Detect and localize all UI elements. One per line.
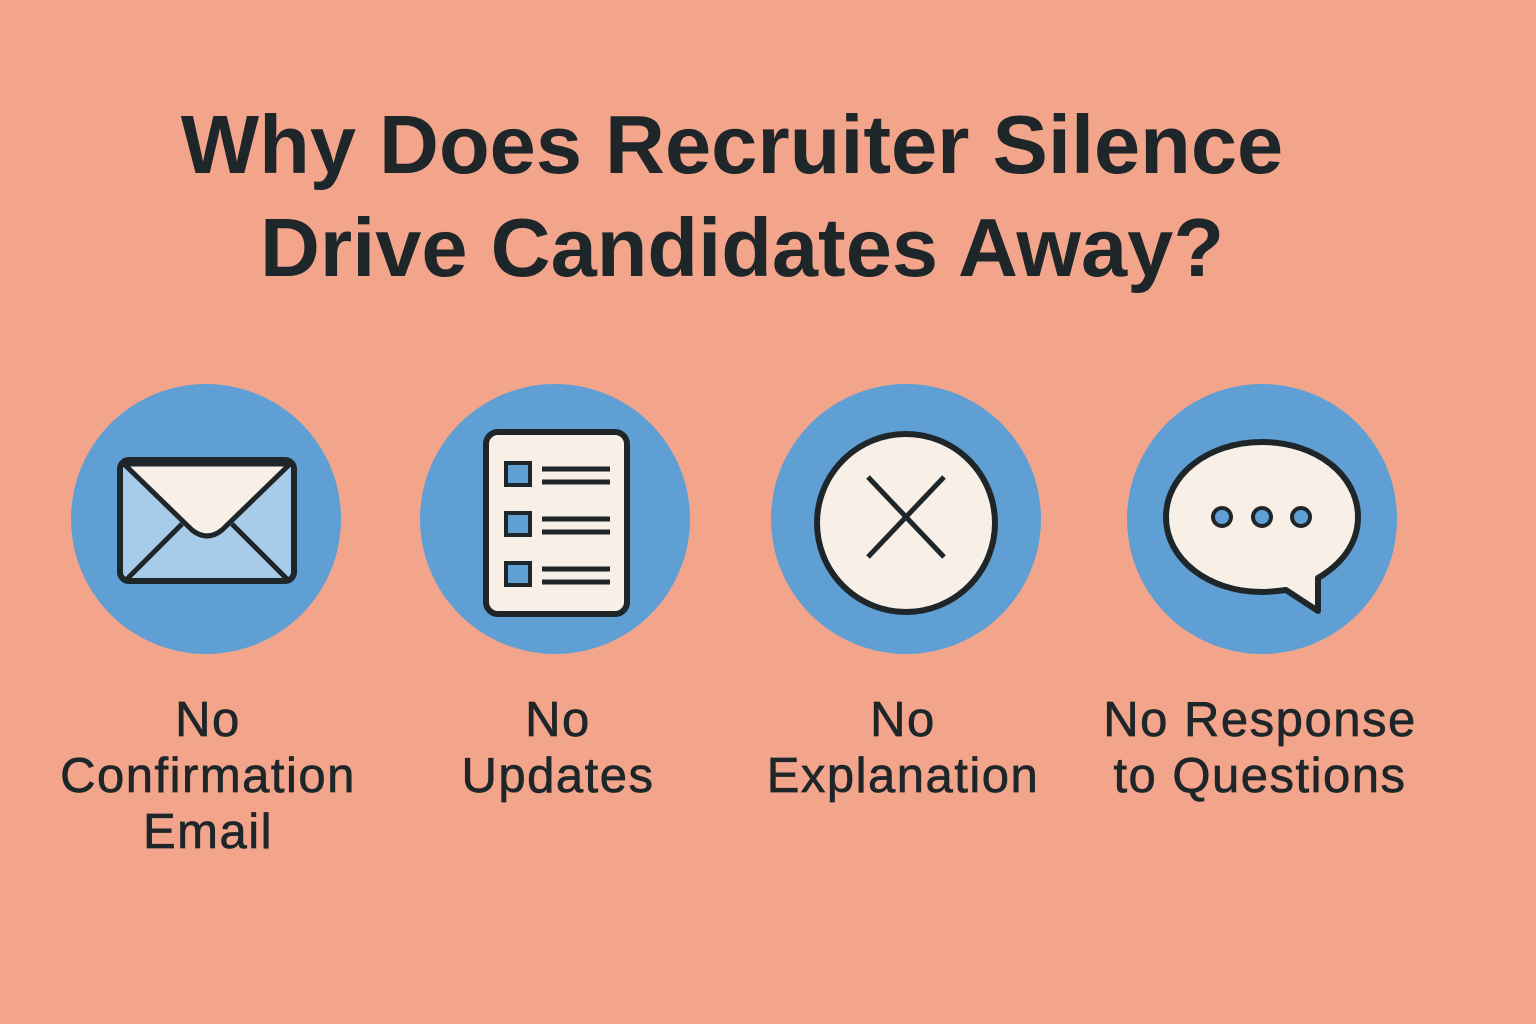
label: no response to questions: to Questions [1113,749,1407,803]
icon: envelope [71,384,341,654]
label: no confirmation email: No [175,693,241,747]
title: Why Does Recruiter Silence [181,98,1283,191]
label: no updates: No [525,693,591,747]
icon: x circle [771,384,1041,654]
label: no response to questions: No Response [1103,693,1417,747]
icon: speech bubble [1127,384,1397,654]
label: no explanation [767,693,1039,803]
label: no confirmation email [60,693,356,859]
label: no updates: Updates [461,749,654,803]
label: no response to questions [1103,693,1417,803]
label: no updates [461,693,654,803]
title: Drive Candidates Away? [260,201,1224,294]
label: no confirmation email: Confirmation [60,749,356,803]
label: no explanation: Explanation [767,749,1039,803]
label: no explanation: No [870,693,936,747]
icon: document checklist [420,384,690,654]
label: no confirmation email: Email [143,805,273,859]
title [180,98,1283,294]
